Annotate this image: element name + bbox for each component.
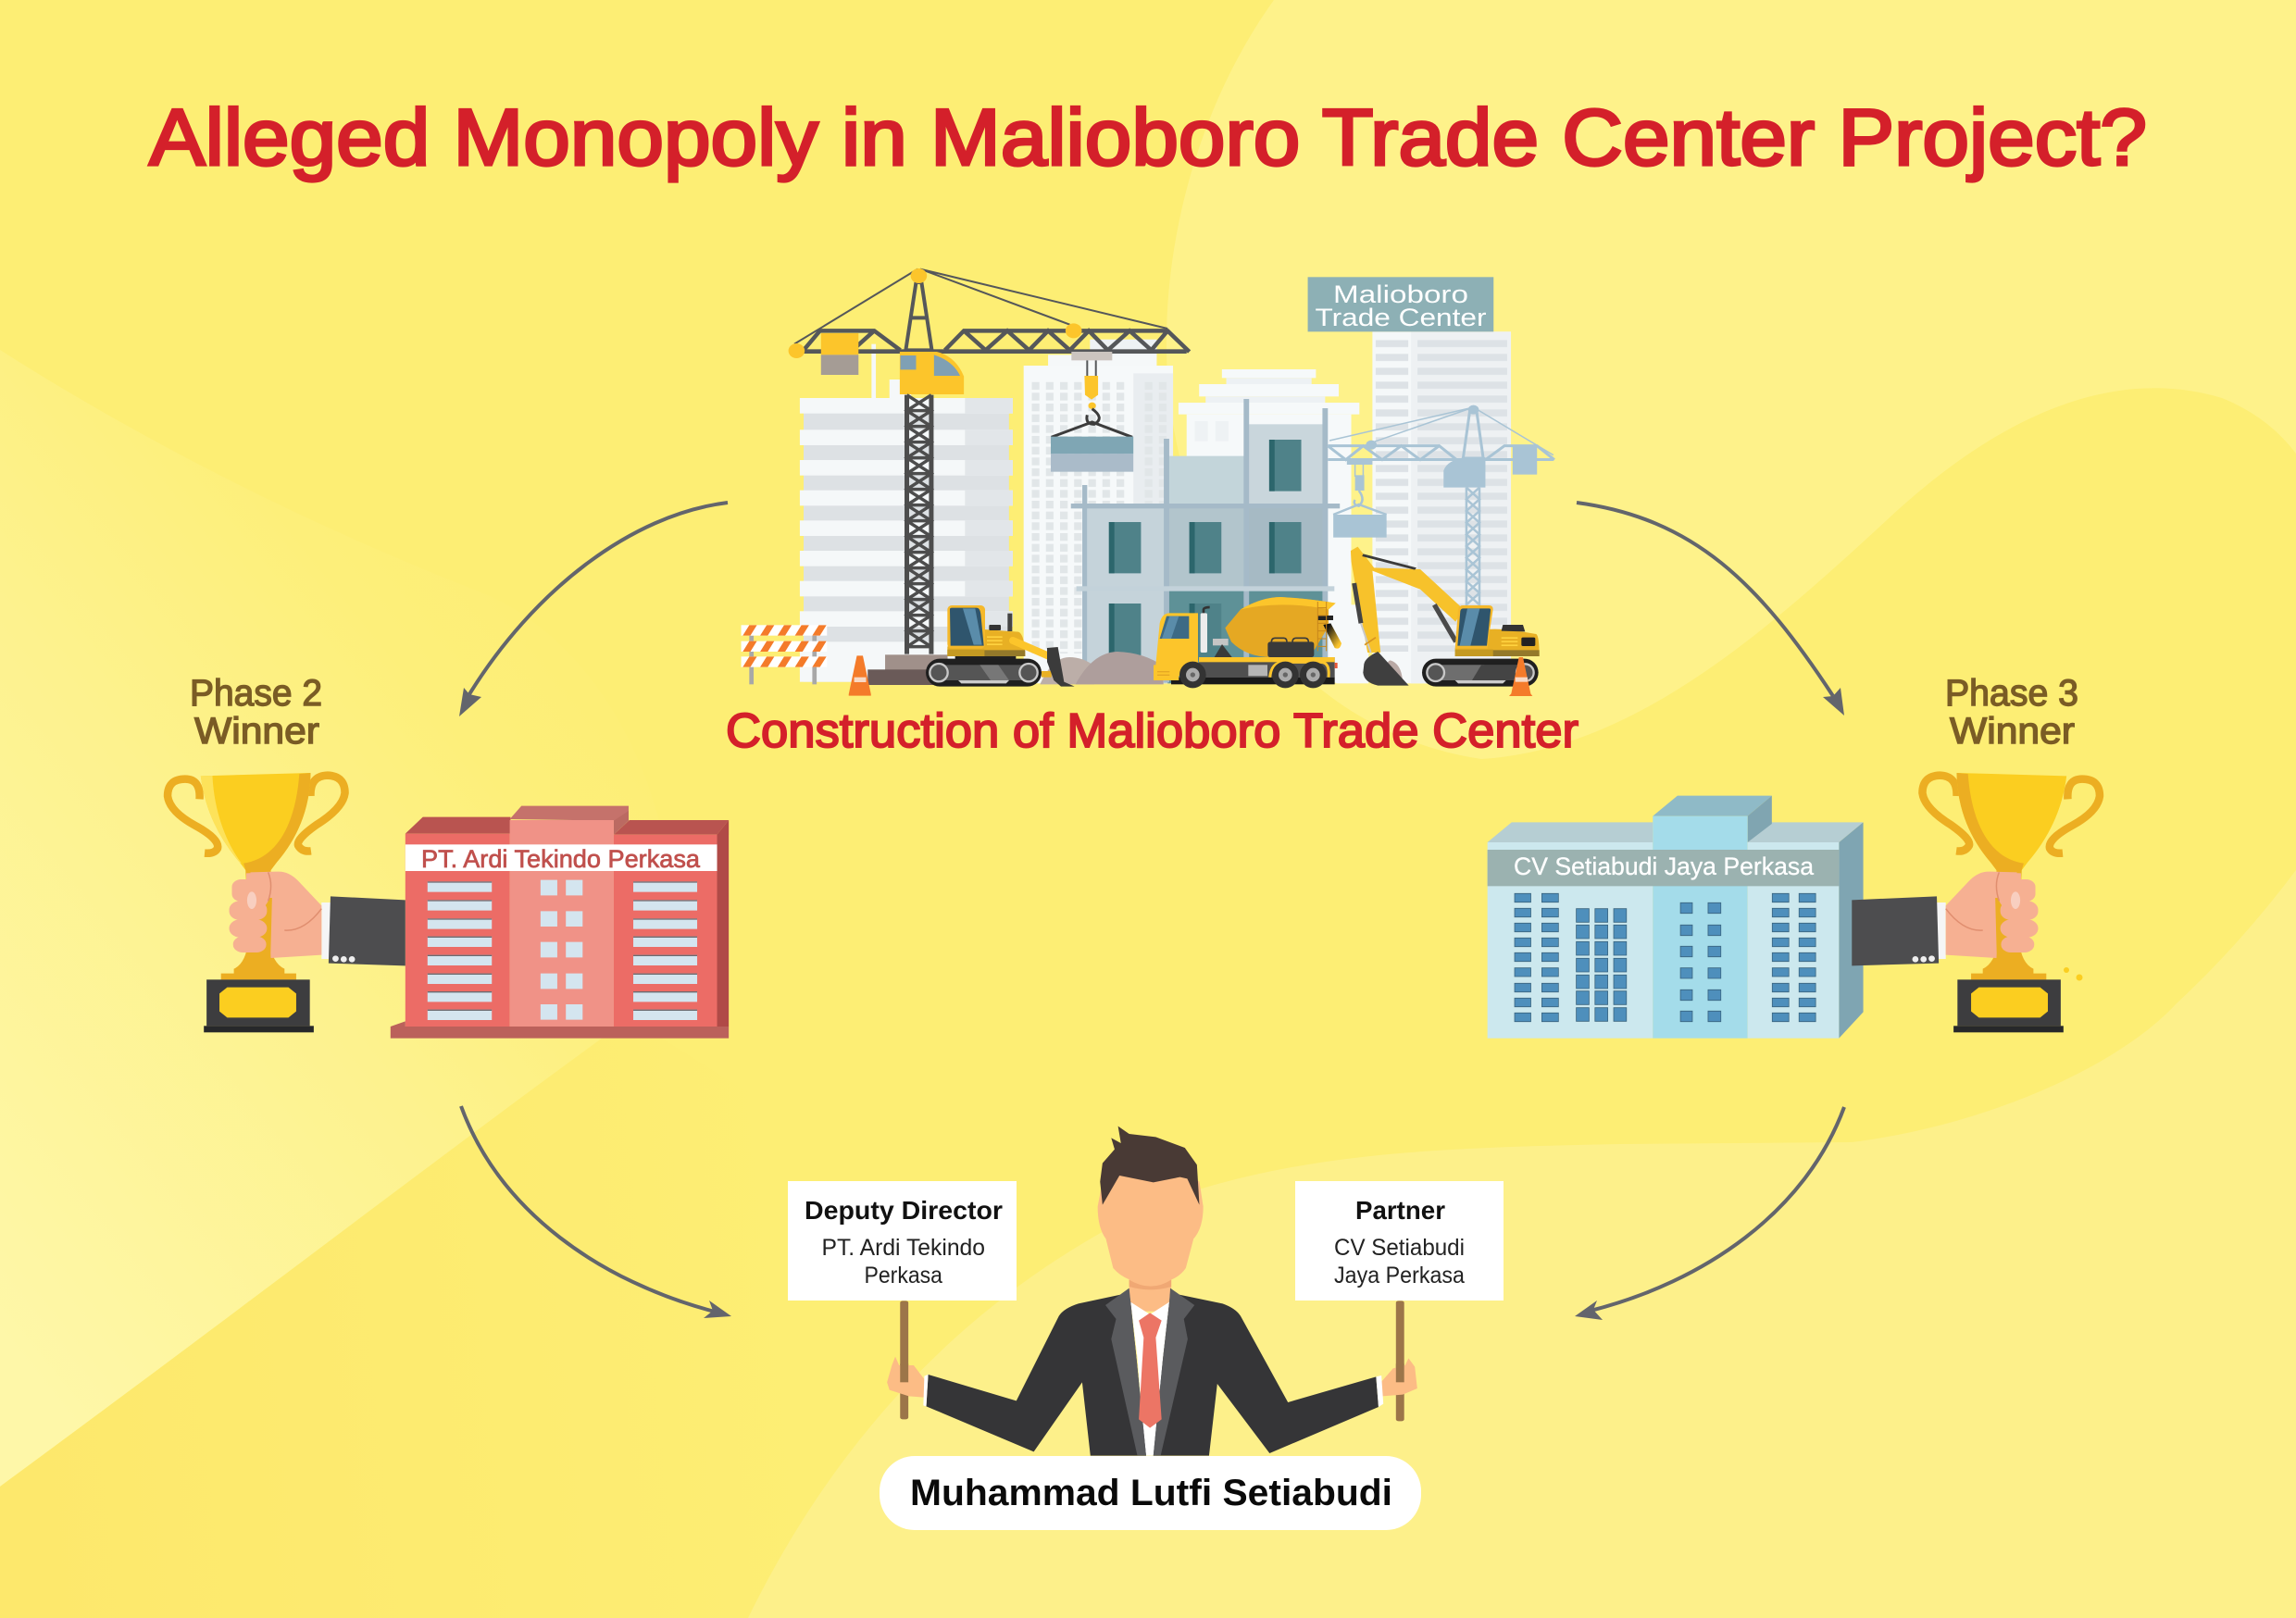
discharge spout — [1323, 623, 1341, 649]
label: Phase 3 Winner: Winner — [1950, 711, 2075, 752]
arrow: phase 2 to person — [461, 1106, 731, 1318]
sign: Deputy Director — [788, 1181, 1017, 1301]
track — [955, 655, 1016, 660]
hair — [1100, 1126, 1199, 1205]
wheels — [1179, 662, 1206, 688]
sign: Malioboro Trade Center — [1308, 277, 1493, 331]
blade arm — [1013, 641, 1050, 656]
boom rod — [1434, 604, 1456, 641]
suit — [926, 1293, 1379, 1456]
blade — [1047, 647, 1075, 687]
hands — [887, 1357, 1417, 1398]
arrow: project to phase 2 — [459, 503, 728, 716]
wheel arches — [1270, 662, 1329, 678]
bucket — [1363, 652, 1409, 686]
shirt — [1130, 1302, 1169, 1456]
sand piles — [1040, 657, 1094, 684]
name pill: Muhammad Lutfi Setiabudi: Muhammad Lutfi Setiabudi — [910, 1473, 1392, 1513]
right tall building — [1372, 331, 1511, 683]
cone — [1509, 657, 1532, 696]
person: Muhammad Lutfi Setiabudi holding signs — [887, 1126, 1417, 1456]
arrow: project to phase 3 — [1577, 503, 1844, 716]
chassis — [1171, 678, 1335, 684]
excavator stick — [1354, 583, 1361, 623]
body — [1455, 629, 1540, 656]
white cuffs — [923, 1375, 1383, 1407]
windows — [428, 880, 697, 1020]
windows — [1515, 893, 1816, 1022]
sign text: Malioboro — [1333, 280, 1468, 308]
lapels — [1105, 1288, 1194, 1456]
middle white building — [1024, 340, 1173, 683]
illustration: construction site — [742, 268, 1554, 696]
trophy and hand: phase 3 — [1852, 773, 2100, 1032]
heading: Construction of Malioboro Trade Center: Construction of Malioboro Trade Center — [726, 704, 1578, 758]
traffic cone — [849, 655, 871, 696]
label: Phase 2 Winner: Phase 2 — [190, 673, 322, 714]
bulldozer and sand piles — [926, 605, 1164, 687]
sign: Partner: Jaya Perkasa — [1334, 1263, 1465, 1288]
sign: Partner: Partner — [1355, 1196, 1445, 1225]
rock behind bucket — [1385, 660, 1403, 685]
shaft — [1213, 639, 1229, 645]
building name: CV Setiabudi Jaya Perkasa: CV Setiabudi Jaya Perkasa — [1514, 853, 1815, 880]
crane: main yellow — [789, 268, 1190, 654]
rear white building — [1179, 369, 1368, 683]
mixer drum — [1225, 597, 1336, 657]
sign: Deputy Director: Deputy Director — [805, 1196, 1003, 1225]
cab — [947, 605, 985, 649]
ladder — [1317, 602, 1327, 651]
arrow: phase 3 to person — [1575, 1107, 1844, 1320]
sign: Partner — [1295, 1181, 1504, 1301]
building: PT. Ardi Tekindo Perkasa — [391, 806, 729, 1039]
cab — [1455, 605, 1493, 649]
sparkles beside trophy — [2064, 967, 2083, 981]
sign: Deputy Director: Perkasa — [865, 1263, 942, 1288]
name pill: Muhammad Lutfi Setiabudi — [880, 1456, 1421, 1530]
yellow rear arm — [1042, 671, 1052, 678]
sign: Partner: CV Setiabudi — [1334, 1235, 1465, 1261]
building: CV Setiabudi Jaya Perkasa — [1488, 796, 1864, 1039]
crane: blue background — [1328, 405, 1554, 608]
track — [1422, 659, 1539, 687]
cab — [1154, 613, 1201, 680]
body — [947, 629, 1025, 656]
building name: PT. Ardi Tekindo Perkasa: PT. Ardi Tekindo Perkasa — [421, 845, 701, 873]
label: Phase 2 Winner: Winner — [194, 711, 319, 752]
label: Phase 3 Winner: Phase 3 — [1945, 673, 2078, 714]
steps — [867, 654, 948, 685]
sign poles — [900, 1301, 1404, 1421]
sign text: Trade Center — [1315, 304, 1487, 331]
tie — [1139, 1313, 1162, 1428]
left white building — [800, 344, 1013, 682]
road barrier — [742, 625, 827, 684]
sign: Deputy Director: PT. Ardi Tekindo — [822, 1235, 985, 1261]
exhaust and air tank — [1204, 607, 1210, 614]
excavator boom — [1351, 547, 1464, 653]
title: Alleged Monopoly in Malioboro Trade Center Project? — [149, 93, 2147, 182]
neck and head — [1098, 1173, 1204, 1312]
cement mixer truck and excavator — [1154, 583, 1540, 696]
tanks — [1267, 641, 1314, 657]
trophy and hand: phase 2 — [168, 773, 406, 1032]
concrete building under construction — [1071, 399, 1340, 683]
